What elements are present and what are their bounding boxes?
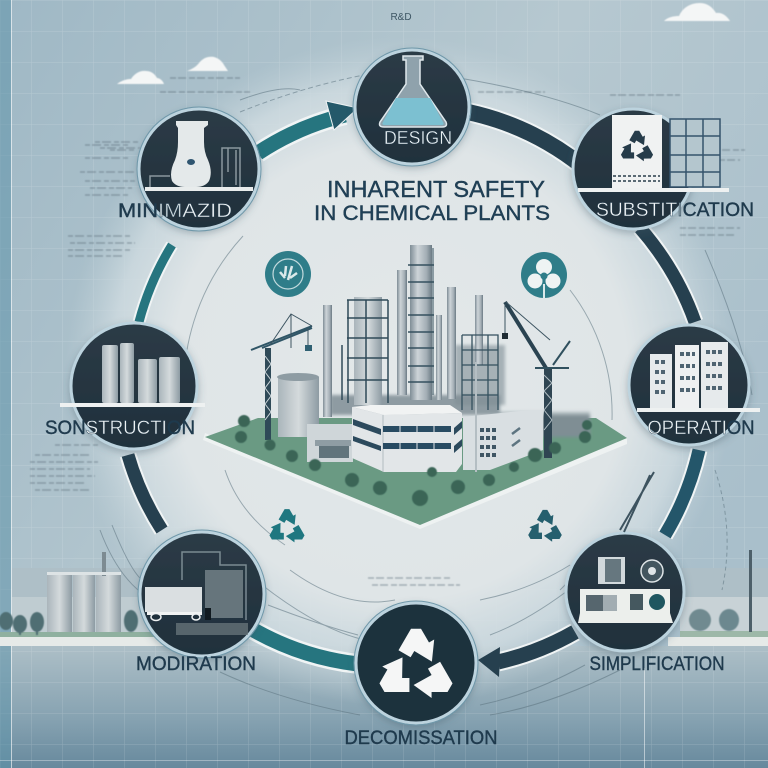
icon: recycling right (525, 510, 565, 544)
icon: cloud top right (664, 3, 730, 21)
title: IN CHEMICAL PLANTS (314, 202, 550, 225)
node: minimization (118, 107, 261, 231)
icon: silos (102, 343, 180, 403)
central light disk (65, 37, 735, 707)
label: design: DESIGN (384, 128, 452, 148)
title: INHARENT SAFETY (327, 176, 545, 202)
icon: teal badge left (265, 251, 311, 297)
node: simplification (566, 472, 724, 675)
icon: recycling (373, 629, 459, 703)
arrow: decommission to modification (250, 628, 358, 664)
icon: buildings (650, 342, 728, 408)
low annex (307, 424, 353, 462)
clouds (117, 3, 730, 84)
label: minimization: MIN IMAZID (118, 201, 232, 222)
icon: left trees (0, 610, 138, 635)
trees and shrubs (235, 415, 592, 506)
node: decommission (344, 601, 498, 749)
faint notes left (30, 142, 140, 490)
faint notes right (160, 78, 745, 585)
label: decommission: DECOMISSATION (344, 728, 498, 749)
arrow: operation to simplification (665, 450, 699, 535)
icon: crane (620, 472, 654, 532)
icon: recycling left (266, 509, 308, 545)
node: construction (45, 323, 205, 449)
right crane (502, 302, 570, 458)
icon: cloud left (117, 71, 164, 84)
icon: panel (578, 557, 673, 623)
arrow: construction to minimization (139, 245, 172, 322)
landscape: left horizon with storage tanks (0, 552, 172, 646)
framed column (342, 297, 388, 405)
node: modification (136, 530, 266, 675)
arrow: substitution to operation (640, 228, 695, 322)
label: substitution: SUBSTITICATION (596, 200, 754, 221)
main building (352, 405, 462, 472)
ring arrows (128, 101, 699, 677)
arrow: modification to construction (128, 455, 162, 530)
icon: flask (380, 56, 446, 127)
node: operation (629, 325, 760, 445)
label: modification: MODIRATION (136, 654, 256, 675)
title (314, 176, 550, 225)
R&D label: R&D (390, 12, 412, 23)
icon: truck and plant (145, 552, 248, 635)
node: design (353, 48, 471, 166)
right wing building (463, 362, 543, 472)
icon: cloud right of left (187, 57, 228, 71)
icon: recycling sheet (612, 115, 662, 188)
arrow: design to substitution (468, 112, 582, 166)
label: operation: OPERATION (648, 418, 754, 439)
platform (203, 418, 627, 529)
label: construction: SONSTRUCTION (45, 418, 195, 439)
shelf (578, 188, 729, 192)
icon: vessel (150, 121, 240, 187)
node: substitution (573, 109, 754, 229)
arrow: minimization to design (258, 101, 358, 153)
shelf (145, 187, 253, 191)
frame structure (670, 119, 720, 187)
faint annotation lines (100, 70, 752, 715)
storage tank (277, 373, 319, 437)
background haze of pipework (330, 345, 590, 437)
thin chimney (323, 305, 332, 417)
right scaffolding (462, 335, 498, 410)
arrow: simplification to decommission (478, 632, 575, 677)
shelf (637, 408, 760, 412)
chemical plant illustration (203, 245, 627, 529)
silo tanks (47, 552, 121, 632)
label: simplification: SIMPLIFICATION (590, 654, 724, 675)
landscape: right horizon (668, 550, 768, 646)
shelf (60, 403, 205, 407)
left crane (251, 314, 312, 440)
chimneys (397, 270, 483, 400)
tall tower (408, 245, 434, 400)
icon: teal badge right (521, 252, 567, 298)
